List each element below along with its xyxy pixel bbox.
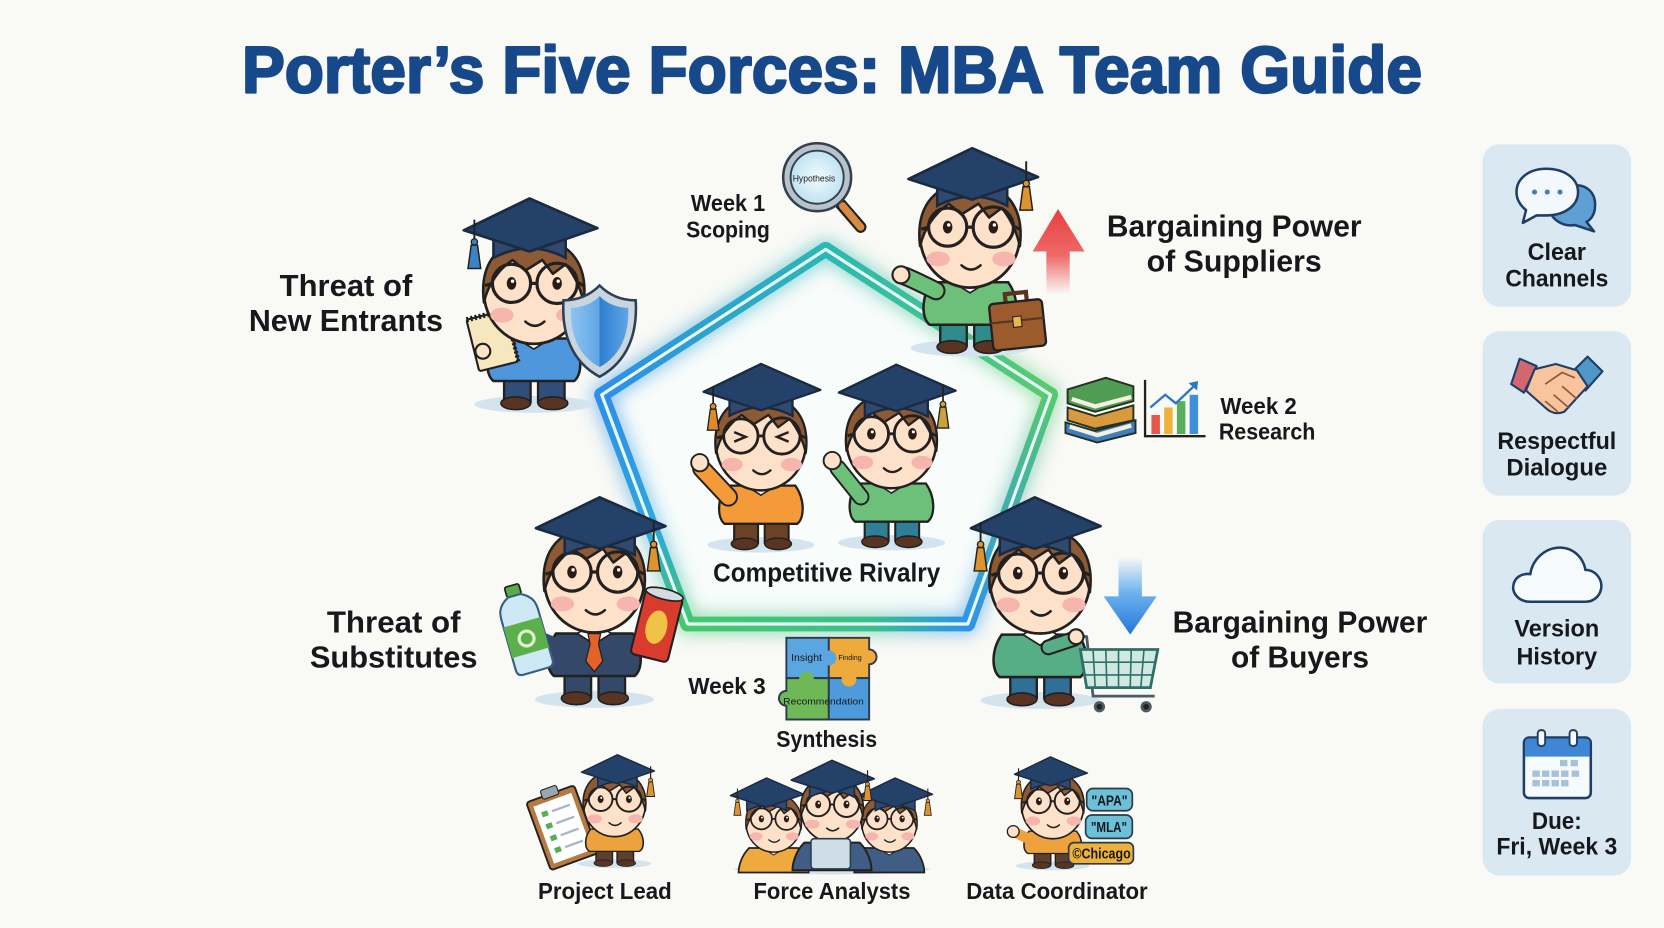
- student with notepad and shield: [464, 198, 636, 413]
- card: respectful dialogue: [1483, 331, 1631, 496]
- label: Version: [1514, 616, 1599, 643]
- label: week 1 scoping: Scoping: [686, 217, 770, 243]
- icon: calendar: [1524, 730, 1591, 798]
- card: due date: [1483, 709, 1631, 876]
- glowing pentagon: [602, 249, 1051, 624]
- label: bargaining power of buyers: Bargaining Power: [1173, 604, 1427, 639]
- label: Due:: [1532, 808, 1582, 835]
- student: orange sweater, winking: [691, 364, 820, 552]
- icon: soda can: [630, 584, 684, 663]
- icon: stack of books: [1065, 378, 1136, 443]
- label: threat of new entrants: New Entrants: [249, 303, 443, 338]
- label: week 1 scoping: [686, 190, 770, 243]
- badge: Chicago: [1069, 843, 1133, 864]
- icon: puzzle: Recommendation: [783, 697, 864, 708]
- centre: competitive rivalry: [691, 364, 956, 588]
- icon: puzzle: Finding: [838, 653, 862, 662]
- label: History: [1516, 643, 1598, 670]
- badge: MLA: "MLA": [1091, 820, 1127, 836]
- icon: puzzle: [779, 638, 877, 720]
- label: data coordinator: Data Coordinator: [966, 878, 1148, 904]
- label: bargaining power of buyers: of Buyers: [1231, 640, 1369, 675]
- label: bargaining power of buyers: [1173, 604, 1427, 675]
- student with shopping cart: [971, 497, 1158, 711]
- label: bargaining power of suppliers: of Suppliers: [1147, 244, 1322, 279]
- force: threat of substitutes: [310, 497, 684, 708]
- student: project lead: [578, 755, 655, 868]
- force: bargaining power of buyers: [971, 497, 1427, 711]
- label: week 3: Week 3: [688, 673, 766, 699]
- icon: bar chart with trend arrow: [1145, 380, 1206, 436]
- student: left analyst: [730, 778, 809, 873]
- label: force analysts: Force Analysts: [753, 878, 911, 904]
- icon: magnifying glass: Hypothesis: [793, 173, 835, 184]
- arrow: blue down: [1104, 557, 1157, 635]
- label: project lead: Project Lead: [538, 878, 672, 904]
- timeline: week 1 scoping: [686, 143, 861, 243]
- badge: APA: "APA": [1091, 793, 1128, 809]
- force: bargaining power of suppliers: [892, 148, 1362, 357]
- timeline: week 3 synthesis: [688, 638, 877, 752]
- badge: Chicago: ©Chicago: [1072, 847, 1131, 863]
- icon: clipboard: [524, 779, 599, 870]
- label: Clear: [1528, 239, 1586, 266]
- title: Porter’s Five Forces: MBA Team Guide: [242, 32, 1422, 106]
- label: week 2 research: Research: [1219, 418, 1315, 444]
- card: clear channels: [1483, 144, 1631, 307]
- badge: APA: [1087, 788, 1132, 811]
- label: threat of new entrants: [249, 268, 443, 338]
- label: week 2 research: [1219, 393, 1315, 444]
- label: threat of substitutes: Substitutes: [310, 640, 478, 675]
- label: [1496, 808, 1617, 860]
- shadow under analysts: [734, 864, 930, 874]
- student: green sweater: [824, 365, 956, 550]
- icon: notepad: [466, 310, 518, 371]
- student in suit with bottle and can: [493, 497, 684, 708]
- icon: puzzle: Insight: [791, 653, 822, 664]
- label: competitive rivalry: Competitive Rivalry: [713, 560, 941, 588]
- label: week 1 scoping: Week 1: [691, 190, 765, 216]
- card: version history: [1483, 520, 1631, 683]
- icon: magnifying glass: [783, 143, 861, 227]
- label: threat of substitutes: Threat of: [327, 604, 461, 639]
- team role: force analysts: [730, 760, 932, 904]
- badge: MLA: [1086, 815, 1132, 838]
- label: bargaining power of suppliers: [1107, 209, 1362, 279]
- student: data coordinator: [1007, 757, 1090, 870]
- arrow: red up: [1033, 209, 1085, 294]
- label: threat of substitutes: [310, 604, 478, 675]
- label: bargaining power of suppliers: Bargaining Power: [1107, 209, 1362, 244]
- student: right analyst: [854, 778, 932, 873]
- student: centre analyst with tablet: [791, 760, 874, 870]
- force: threat of new entrants: [249, 198, 636, 413]
- icon: handshake: [1511, 357, 1602, 413]
- icon: shopping cart: [1072, 635, 1158, 711]
- team role: data coordinator: [966, 757, 1148, 904]
- label: week 2 research: Week 2: [1220, 393, 1297, 419]
- timeline: week 2 research: [1065, 378, 1315, 444]
- icon: water bottle: [493, 580, 554, 676]
- icon: shield: [563, 285, 636, 377]
- icon: briefcase: [988, 290, 1046, 351]
- label: Channels: [1505, 266, 1608, 293]
- label: threat of new entrants: Threat of: [280, 268, 413, 303]
- team role: project lead: [524, 755, 672, 904]
- icon: cloud: [1513, 548, 1601, 602]
- student with briefcase: [892, 148, 1046, 357]
- label: [1505, 239, 1608, 293]
- label: [1514, 616, 1599, 670]
- icon: tablet: [811, 839, 850, 869]
- label: Dialogue: [1506, 454, 1607, 481]
- icon: speech bubbles: [1516, 169, 1595, 231]
- label: Fri, Week 3: [1496, 833, 1617, 860]
- label: synthesis: Synthesis: [776, 726, 877, 752]
- label: Respectful: [1497, 428, 1616, 455]
- label: [1497, 428, 1616, 481]
